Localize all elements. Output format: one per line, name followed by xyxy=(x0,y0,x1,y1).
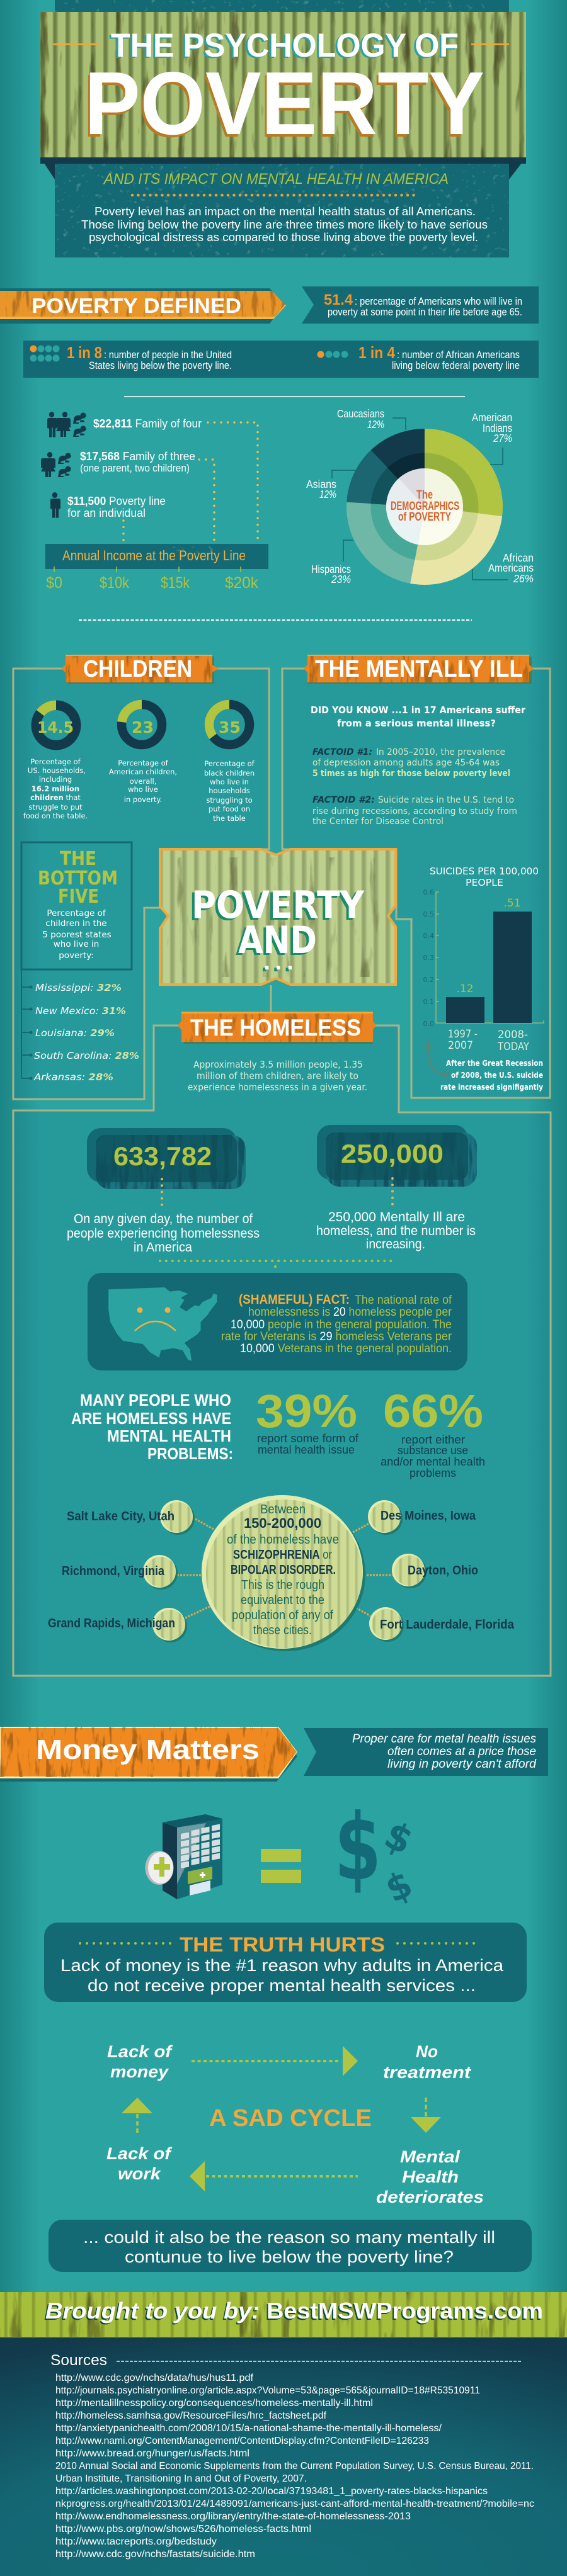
state list: Arkansas: 28% xyxy=(33,1071,113,1083)
icon: hospital xyxy=(145,1814,222,1899)
step: no treatment: treatment xyxy=(383,2063,471,2082)
chart note: After the Great Recession xyxy=(446,1058,543,1068)
donut chart: 23: 23 xyxy=(132,718,154,737)
chart: demographics of poverty pie: of POVERTY xyxy=(398,511,451,524)
stat: 66 percent: 66% xyxy=(383,1385,483,1437)
sources: http://www.tacreports.org/bedstudy xyxy=(55,2536,217,2547)
central panel: poverty and: AND xyxy=(238,918,317,963)
caption column 2: Percentage of xyxy=(118,759,169,767)
section banner: money matters: Money Matters xyxy=(36,1734,260,1765)
closing question box: contunue to live below the poverty line? xyxy=(125,2247,454,2266)
fact text: 10,000 people in the general population. The xyxy=(231,1318,452,1331)
panel: the mentally ill xyxy=(282,655,550,1098)
icon: family of three xyxy=(41,452,71,477)
heading: many people: MENTAL HEALTH xyxy=(107,1426,231,1445)
panel: the bottom five: poverty: xyxy=(59,951,94,961)
intro paragraph: psychological distress as compared to those living above the poverty level. xyxy=(89,230,478,244)
city: Richmond xyxy=(62,1555,178,1590)
city: Des Moines xyxy=(368,1500,476,1535)
factoid 1: of depression among adults age 45-64 was xyxy=(312,758,500,768)
heading: many people: PROBLEMS: xyxy=(147,1444,233,1463)
bar chart: suicides per 100,000: 0.4 xyxy=(423,932,434,940)
caption column 2: overall, xyxy=(130,777,156,786)
stat: 39 percent: 39% xyxy=(256,1385,357,1437)
caption column 1: 16.2 million xyxy=(32,784,79,793)
icon: dollar signs: $ xyxy=(379,1862,419,1911)
panel: the bottom five: who live in xyxy=(54,939,99,949)
donut chart: 14.5: 14.5 xyxy=(37,718,74,737)
arrow: right xyxy=(192,2046,358,2076)
fact text: 10,000 Veterans in the general population. xyxy=(240,1342,452,1355)
caption column 1: including xyxy=(39,775,72,784)
caption column 2: in poverty. xyxy=(124,795,162,804)
factoid 2: the Center for Disease Control xyxy=(312,816,444,827)
bar chart: suicides per 100,000: TODAY xyxy=(497,1041,530,1053)
stat band: 1 in 8 and 1 in 4: living below federal poverty line xyxy=(392,359,520,371)
caption column 3: Percentage of xyxy=(204,759,255,768)
chart: annual income at the poverty line: $10k xyxy=(100,574,129,592)
stat band: 1 in 8 and 1 in 4: 1 in 8 xyxy=(67,343,102,362)
step: mental health deteriorates: Health xyxy=(402,2167,459,2186)
title line 1: THE PSYCHOLOGY OF xyxy=(111,27,459,64)
pie labels: Caucasians xyxy=(337,407,384,420)
caption column 3 xyxy=(204,759,255,823)
diagram: a sad cycle xyxy=(106,2042,484,2206)
chart note: rate increased signifigantly xyxy=(440,1082,543,1092)
stat band: 1 in 8 and 1 in 4: : number of African Americans xyxy=(397,349,520,361)
did you know: DID YOU KNOW ...1 in 17 Americans suffer xyxy=(311,704,525,716)
panel: the bottom five: 5 poorest states xyxy=(42,930,112,940)
chart: annual income at the poverty line: $22,811 Family of four xyxy=(93,417,202,430)
pie labels: 27% xyxy=(493,432,512,444)
city: Dayton: Dayton, Ohio xyxy=(408,1564,478,1578)
stat text: 633,782: in America xyxy=(134,1240,192,1255)
city: Fort Lauderdale xyxy=(369,1607,515,1642)
stat: 66 percent: substance use xyxy=(398,1444,468,1457)
sources: 2010 Annual Social and Economic Supplements from the Current Population Survey, U.S. Census Bureau, 2011. xyxy=(55,2461,534,2471)
central panel: poverty and: POVERTY xyxy=(192,883,365,927)
section banner: poverty defined xyxy=(0,288,287,324)
pie labels: Hispanics xyxy=(311,563,351,575)
chart note: of 2008, the U.S. suicide xyxy=(451,1070,543,1080)
chart: annual income at the poverty line xyxy=(41,412,268,592)
central circle: schizophrenia or bipolar: population of any of xyxy=(232,1608,333,1622)
caption column 3: struggling to xyxy=(206,796,253,805)
panel: the bottom five: children in the xyxy=(45,918,107,929)
section banner: money matters xyxy=(0,1727,297,1782)
state list: New Mexico: 31% xyxy=(35,1005,126,1017)
heading: many people xyxy=(71,1391,233,1463)
stat band: 1 in 8 and 1 in 4: States living below the poverty line. xyxy=(89,359,232,371)
stat: 66 percent: and/or mental health xyxy=(381,1455,485,1468)
callout: proper care: often comes at a price those xyxy=(387,1745,536,1758)
homeless intro text xyxy=(188,1059,367,1093)
panel: the truth hurts: THE TRUTH HURTS xyxy=(180,1933,385,1956)
icon: individual xyxy=(50,492,60,517)
stat text: 633,782 xyxy=(67,1212,260,1255)
homeless intro text: experience homelessness in a given year. xyxy=(188,1082,367,1093)
bar chart: suicides per 100,000: 0.6 xyxy=(423,888,434,896)
chart: annual income at the poverty line: $20k xyxy=(225,574,258,592)
icon: dots 1 in 8 xyxy=(30,345,59,361)
closing question box xyxy=(49,2220,532,2272)
caption column 1: children that xyxy=(30,793,81,802)
donut chart: 23 xyxy=(119,702,164,747)
stat box: 250,000: 250,000 xyxy=(341,1139,444,1168)
callout: 51.4 percent xyxy=(302,286,539,324)
heading: many people: ARE HOMELESS HAVE xyxy=(71,1409,231,1428)
callout: shameful fact xyxy=(88,1273,467,1370)
stat: 66 percent xyxy=(381,1385,485,1479)
stat text: 633,782: On any given day, the number of xyxy=(74,1212,253,1226)
step: mental health deteriorates: Mental xyxy=(400,2147,461,2166)
panel: the bottom five: BOTTOM xyxy=(38,867,118,890)
city: Richmond: Richmond, Virginia xyxy=(62,1564,165,1578)
factoid 1: 5 times as high for those below poverty level xyxy=(312,769,510,779)
sources: http://anxietypanichealth.com/2008/10/15/a-national-shame-the-mentally-ill-homeless/ xyxy=(55,2423,442,2434)
caption column 1: food on the table. xyxy=(23,811,88,820)
step: lack of work: work xyxy=(118,2164,162,2183)
panel: the truth hurts xyxy=(44,1923,527,2002)
panel: children xyxy=(13,655,269,1099)
city: Des Moines: Des Moines, Iowa xyxy=(381,1509,476,1523)
subtitle: AND ITS IMPACT ON MENTAL HEALTH IN AMERICA xyxy=(103,171,449,188)
pie labels: 26% xyxy=(513,572,534,585)
stat text: 250,000 xyxy=(316,1210,476,1251)
sources: http://articles.washingtonpost.com/2013-02-20/local/37193481_1_poverty-rates-blacks-hispanics xyxy=(55,2486,488,2497)
bar chart: suicides per 100,000: 0.2 xyxy=(423,976,434,984)
closing question box: ... could it also be the reason so many mentally ill xyxy=(83,2228,495,2247)
homeless intro text: million of them children, are likely to xyxy=(197,1070,358,1082)
panel: the bottom five: THE xyxy=(60,848,96,870)
sources: http://www.pbs.org/now/shows/526/homeless-facts.html xyxy=(55,2524,311,2534)
step: no treatment: No xyxy=(416,2042,438,2061)
panel: the bottom five: FIVE xyxy=(58,886,99,908)
bar chart: suicides per 100,000: 0.3 xyxy=(423,954,434,962)
heading: many people: MANY PEOPLE WHO xyxy=(80,1391,231,1409)
bar chart: suicides per 100,000: SUICIDES PER 100,000 xyxy=(430,866,539,877)
intro paragraph xyxy=(81,205,488,244)
step: lack of work: Lack of xyxy=(106,2144,173,2163)
bar chart: suicides per 100,000: 2007 xyxy=(448,1039,473,1051)
caption column 3: put food on xyxy=(209,805,250,813)
title banner xyxy=(40,0,526,179)
state list: Mississippi: 32% xyxy=(35,982,122,993)
fact text: homelessness is 20 homeless people per xyxy=(248,1306,452,1319)
stat text: 250,000: increasing. xyxy=(366,1237,425,1251)
section banner: poverty defined: POVERTY DEFINED xyxy=(32,294,241,317)
credit band: BestMSWPrograms.com xyxy=(266,2298,543,2324)
sources xyxy=(50,2352,534,2560)
bar chart: suicides per 100,000: .12 xyxy=(456,983,474,995)
chart: demographics of poverty pie: The xyxy=(416,489,433,502)
bar chart: suicides per 100,000: .51 xyxy=(503,897,521,910)
panel: the truth hurts: Lack of money is the #1 reason why adults in America xyxy=(60,1956,504,1975)
fact text: rate for Veterans is 29 homeless Veterans per xyxy=(221,1330,452,1343)
central circle: schizophrenia or bipolar: This is the rough xyxy=(241,1578,324,1592)
central circle: schizophrenia or bipolar: BIPOLAR DISORDER. xyxy=(231,1563,336,1577)
icon: equals sign xyxy=(261,1849,301,1883)
caption column 2: who live xyxy=(128,785,158,794)
stat: 66 percent: problems xyxy=(410,1467,456,1479)
stat text: 633,782: people experiencing homelessness xyxy=(67,1226,260,1241)
arrow: curved up xyxy=(423,1040,449,1078)
pie labels: Asians xyxy=(306,478,336,490)
caption column 1: US. households, xyxy=(28,766,86,775)
caption column 3: households xyxy=(209,786,250,795)
factoid 1: FACTOID #1: xyxy=(312,747,372,757)
stat text: 250,000: 250,000 Mentally Ill are xyxy=(328,1210,465,1224)
donut chart: 35: 35 xyxy=(219,718,241,737)
arrow: up xyxy=(122,2098,152,2133)
factoid 2: FACTOID #2: xyxy=(312,795,375,805)
heading: the mentally ill: THE MENTALLY ILL xyxy=(315,656,523,682)
heading: the homeless: THE HOMELESS xyxy=(190,1015,361,1041)
fact text: (SHAMEFUL) FACT: xyxy=(239,1292,350,1307)
city: Salt Lake City xyxy=(67,1500,195,1535)
bar chart: suicides per 100,000: 0.5 xyxy=(423,910,434,918)
central panel: poverty and xyxy=(160,849,396,985)
intro panel xyxy=(55,164,509,257)
city: Grand Rapids xyxy=(48,1608,187,1642)
fact text: The national rate of xyxy=(355,1294,452,1307)
callout: 51.4 percent: poverty at some point in their life before age 65. xyxy=(328,306,522,318)
city: Salt Lake City: Salt Lake City, Utah xyxy=(67,1510,175,1523)
stat: 39 percent: mental health issue xyxy=(258,1443,355,1456)
caption column 2: American children, xyxy=(109,767,177,776)
homeless intro text: Approximately 3.5 million people, 1.35 xyxy=(193,1059,363,1070)
caption column 3: the table xyxy=(213,814,246,823)
chart: demographics of poverty pie: DEMOGRAPHICS xyxy=(391,500,459,513)
step: lack of work xyxy=(106,2144,173,2183)
chart: annual income at the poverty line: $17,568 Family of three xyxy=(80,450,195,463)
sources: http://www.nami.org/ContentManagement/ContentDisplay.cfm?ContentFileID=126233 xyxy=(55,2436,429,2446)
sources: http://mentalillnesspolicy.org/consequences/homeless-mentally-ill.html xyxy=(55,2398,373,2409)
step: no treatment xyxy=(383,2042,471,2082)
bar chart: suicides per 100,000: 0.1 xyxy=(423,998,434,1006)
icon: dots 1 in 4 xyxy=(318,351,348,358)
step: lack of money: Lack of xyxy=(107,2042,173,2061)
step: mental health deteriorates xyxy=(376,2147,484,2206)
pie labels: African xyxy=(503,551,534,564)
did you know xyxy=(311,704,525,729)
sources: http://www.bread.org/hunger/us/facts.html xyxy=(55,2448,249,2459)
pie labels xyxy=(306,407,534,585)
stat: 66 percent: report either xyxy=(401,1433,465,1446)
arrow: down xyxy=(411,2098,441,2133)
central circle: schizophrenia or bipolar xyxy=(202,1495,365,1651)
factoid 1 xyxy=(312,747,510,779)
pie labels: 12% xyxy=(367,418,384,431)
central circle: schizophrenia or bipolar: equivalent to the xyxy=(241,1593,324,1607)
intro paragraph: Poverty level has an impact on the mental health status of all Americans. xyxy=(94,205,476,218)
central circle: schizophrenia or bipolar: these cities. xyxy=(253,1624,312,1637)
callout: 51.4 percent: : percentage of Americans who will live in xyxy=(355,295,522,307)
chart: annual income at the poverty line: for an individual xyxy=(67,507,146,519)
sources: http://www.cdc.gov/nchs/fastats/suicide.htm xyxy=(55,2549,255,2560)
callout: proper care: Proper care for metal health issues xyxy=(352,1732,536,1746)
arrow: left xyxy=(190,2161,358,2191)
factoid 1: In 2005–2010, the prevalence xyxy=(376,747,505,757)
state list: South Carolina: 28% xyxy=(34,1050,139,1061)
central circle: schizophrenia or bipolar: Between xyxy=(260,1503,306,1517)
fact text xyxy=(221,1292,452,1355)
chart: annual income at the poverty line: (one parent, two children) xyxy=(80,462,190,474)
state list: Louisiana: 29% xyxy=(35,1027,115,1039)
central circle: schizophrenia or bipolar: SCHIZOPHRENIA or xyxy=(233,1548,332,1562)
city: Grand Rapids: Grand Rapids, Michigan xyxy=(48,1617,175,1630)
callout: 51.4 percent: 51.4 xyxy=(324,291,353,308)
chart: annual income at the poverty line: $15k xyxy=(161,574,190,592)
sources: http://journals.psychiatryonline.org/article.aspx?Volume=53&page=565&journalID=18#R53510911 xyxy=(55,2385,480,2396)
icon: dollar signs: $ xyxy=(378,1813,419,1863)
caption column 3: black children xyxy=(204,769,255,777)
bar chart: suicides per 100,000: 0.0 xyxy=(423,1020,434,1028)
factoid 2: rise during recessions, according to study from xyxy=(312,806,517,816)
stat text: 250,000: homeless, and the number is xyxy=(316,1224,476,1238)
city: Dayton xyxy=(392,1554,478,1588)
bar chart: suicides per 100,000 xyxy=(423,866,544,1053)
sources: Sources xyxy=(50,2352,107,2369)
title line 2: POVERTY xyxy=(84,54,484,154)
chart: annual income at the poverty line: $11,500 Poverty line xyxy=(67,495,166,507)
panel: the bottom five: Percentage of xyxy=(47,908,106,918)
caption column 1: Percentage of xyxy=(30,757,81,766)
sources: http://www.endhomelessness.org/library/entry/the-state-of-homelessness-2013 xyxy=(55,2511,411,2522)
caption column 1: struggle to put xyxy=(28,803,83,811)
icon: sad US map xyxy=(108,1287,217,1361)
intro paragraph: Those living below the poverty line are three times more likely to have serious xyxy=(81,218,488,231)
sources: http://homeless.samhsa.gov/ResourceFiles/hrc_factsheet.pdf xyxy=(55,2410,327,2421)
sources: nkprogress.org/health/2013/01/24/1489091/americans-just-cant-afford-mental-health-treatment/?mobile=nc xyxy=(55,2499,534,2509)
footer background xyxy=(0,2337,567,2576)
factoid 2: Suicide rates in the U.S. tend to xyxy=(378,795,514,805)
pie labels: 12% xyxy=(319,488,336,500)
stat box: 633,782: 633,782 xyxy=(113,1141,212,1171)
panel: the homeless xyxy=(13,985,551,1676)
bar chart: suicides per 100,000: PEOPLE xyxy=(466,877,503,888)
donut chart: 14.5 xyxy=(28,698,84,753)
sources: Urban Institute, Transitioning In and Out of Poverty, 2007. xyxy=(55,2473,307,2484)
chart: annual income at the poverty line: Annual Income at the Poverty Line xyxy=(62,548,246,563)
stat band: 1 in 8 and 1 in 4: : number of people in the United xyxy=(104,349,232,361)
step: mental health deteriorates: deteriorates xyxy=(376,2188,484,2206)
bar chart: suicides per 100,000: 1997 - xyxy=(448,1028,478,1040)
state list xyxy=(33,982,139,1083)
chart note xyxy=(440,1058,543,1092)
credit band: Brought to you by: xyxy=(45,2298,260,2324)
central circle: schizophrenia or bipolar: of the homeless have xyxy=(227,1533,339,1547)
stat box: 250,000 xyxy=(317,1125,477,1187)
caption column 1 xyxy=(23,757,88,820)
panel: the bottom five xyxy=(21,842,139,1083)
factoid 2 xyxy=(312,795,517,827)
chart: annual income at the poverty line: $0 xyxy=(46,574,62,592)
icon: dollar signs xyxy=(335,1794,419,1911)
bar chart: suicides per 100,000: 2008- xyxy=(498,1029,528,1041)
caption column 2 xyxy=(109,759,177,804)
central panel: poverty and: ... xyxy=(263,952,294,974)
stat: 39 percent xyxy=(256,1385,359,1456)
diagram: a sad cycle: A SAD CYCLE xyxy=(209,2105,372,2132)
stat box: 633,782 xyxy=(87,1128,246,1189)
central circle: schizophrenia or bipolar: 150-200,000 xyxy=(244,1515,321,1531)
stat: 39 percent: report some form of xyxy=(257,1432,359,1445)
stat band: 1 in 8 and 1 in 4 xyxy=(23,341,539,378)
step: lack of money xyxy=(107,2042,173,2081)
sources: http://www.cdc.gov/nchs/data/hus/hus11.pdf xyxy=(55,2373,254,2383)
pie labels: American xyxy=(472,411,512,424)
callout: proper care xyxy=(304,1728,548,1776)
pie labels: Americans xyxy=(488,562,534,574)
step: lack of money: money xyxy=(110,2062,169,2081)
donut chart: 35 xyxy=(201,696,258,753)
pie labels: Indians xyxy=(483,422,512,434)
icon: dollar signs: $ xyxy=(335,1794,381,1901)
did you know: from a serious mental illness? xyxy=(337,718,496,729)
stat band: 1 in 8 and 1 in 4: 1 in 4 xyxy=(358,343,395,362)
panel: the truth hurts: do not receive proper mental health services ... xyxy=(88,1976,476,1995)
caption column 3: who live in xyxy=(210,777,249,786)
icon: family of four xyxy=(47,412,86,437)
pie labels: 23% xyxy=(331,573,351,585)
chart: demographics of poverty pie xyxy=(306,407,534,600)
heading: children: CHILDREN xyxy=(83,656,192,682)
city: Fort Lauderdale: Fort Lauderdale, Florida xyxy=(380,1618,515,1632)
callout: proper care: living in poverty can't afford xyxy=(387,1758,537,1771)
credit band xyxy=(0,2292,567,2337)
